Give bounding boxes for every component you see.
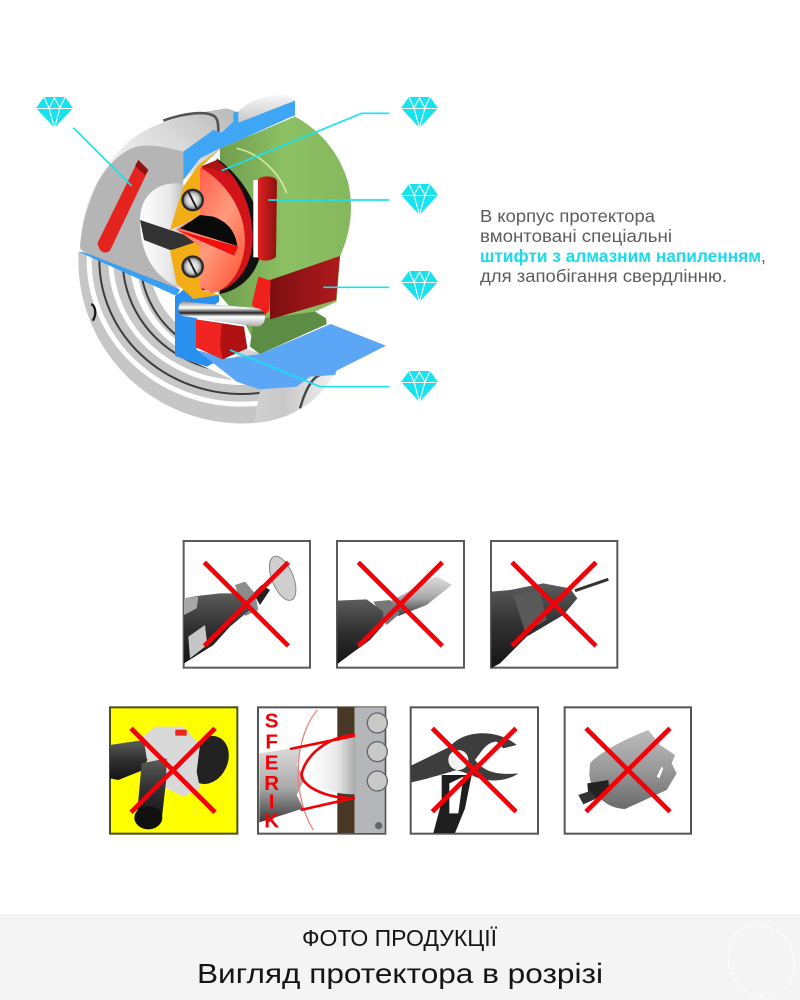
icon: diamond bottom right bbox=[401, 371, 438, 402]
panel: pliers bbox=[411, 707, 538, 834]
black disc backing bbox=[217, 158, 263, 294]
left red pin bbox=[97, 160, 148, 253]
green base shade bbox=[250, 312, 327, 354]
footer band bbox=[0, 914, 800, 1000]
bottom right leader line bbox=[230, 350, 389, 387]
panel: angle grinder on yellow bbox=[110, 707, 237, 834]
dark red insert block bbox=[270, 256, 340, 319]
upper screw bbox=[181, 189, 204, 211]
salmon red disc bbox=[177, 167, 245, 293]
top right leader line bbox=[222, 113, 389, 171]
core slot bbox=[140, 220, 200, 250]
orange plate bbox=[170, 150, 219, 299]
panel: SFERIK protector: SFERIK bbox=[264, 709, 279, 833]
bottom right forbidden tools bbox=[411, 707, 691, 834]
panel: twist drill bbox=[491, 541, 617, 668]
red cross 1 bbox=[204, 562, 288, 646]
white centre core bbox=[140, 183, 190, 288]
icon: diamond left bbox=[36, 97, 73, 128]
top rear rim bbox=[233, 95, 295, 125]
green protector body bbox=[218, 117, 351, 354]
icon: diamond top right bbox=[401, 97, 438, 128]
concentric rings bbox=[78, 252, 260, 424]
third right leader line bbox=[323, 285, 389, 290]
left leader line bbox=[73, 128, 132, 186]
icon: diamond second right bbox=[401, 184, 438, 215]
red slot edge bbox=[177, 230, 238, 256]
bottom left forbidden tools bbox=[110, 707, 387, 834]
description text: вмонтовані спеціальні bbox=[480, 226, 672, 246]
blue cut line bbox=[78, 252, 180, 296]
green arc highlight bbox=[237, 148, 287, 193]
description text bbox=[480, 206, 766, 286]
gray front face bbox=[80, 146, 183, 293]
blue lower plate bbox=[197, 324, 386, 389]
panel: core bit on drill bbox=[337, 541, 464, 668]
panel: hole saw bbox=[565, 707, 691, 834]
top row of forbidden tools bbox=[184, 541, 617, 668]
panel: rotary cutting tool bbox=[184, 541, 310, 668]
footer main heading: Вигляд протектора в розрізі bbox=[197, 958, 603, 989]
bright wedge face bbox=[196, 319, 223, 359]
right red pin bbox=[253, 176, 277, 261]
blue upper section bbox=[183, 101, 295, 180]
red cross 2 bbox=[358, 562, 442, 646]
steel horizontal pin bbox=[178, 302, 265, 327]
red cross 3 bbox=[512, 562, 596, 646]
rear silver rim bbox=[233, 347, 335, 424]
description text: В корпус протектора bbox=[480, 206, 655, 226]
second right leader line bbox=[268, 197, 389, 202]
cutaway protector illustration bbox=[73, 95, 405, 424]
icon: diamond third right bbox=[401, 271, 438, 302]
footer small heading: ФОТО ПРОДУКЦІЇ bbox=[302, 925, 497, 951]
blue lower section bbox=[175, 289, 220, 367]
black key slot bbox=[180, 215, 237, 246]
upper groove bbox=[163, 113, 218, 132]
bright red insert side bbox=[252, 277, 271, 315]
footer watermark outline bbox=[728, 926, 794, 997]
bottom groove bbox=[300, 375, 320, 408]
upper outer band bbox=[80, 108, 237, 247]
lower screw bbox=[181, 255, 204, 278]
upper red pin bbox=[201, 160, 233, 177]
dark red disc edge bbox=[202, 160, 253, 292]
panel: SFERIK protector bbox=[258, 707, 387, 834]
red lower wedge bbox=[196, 319, 247, 359]
description text: для запобігання свердлінню. bbox=[480, 266, 727, 286]
description text: штифти з алмазним напиленням, bbox=[480, 246, 766, 266]
